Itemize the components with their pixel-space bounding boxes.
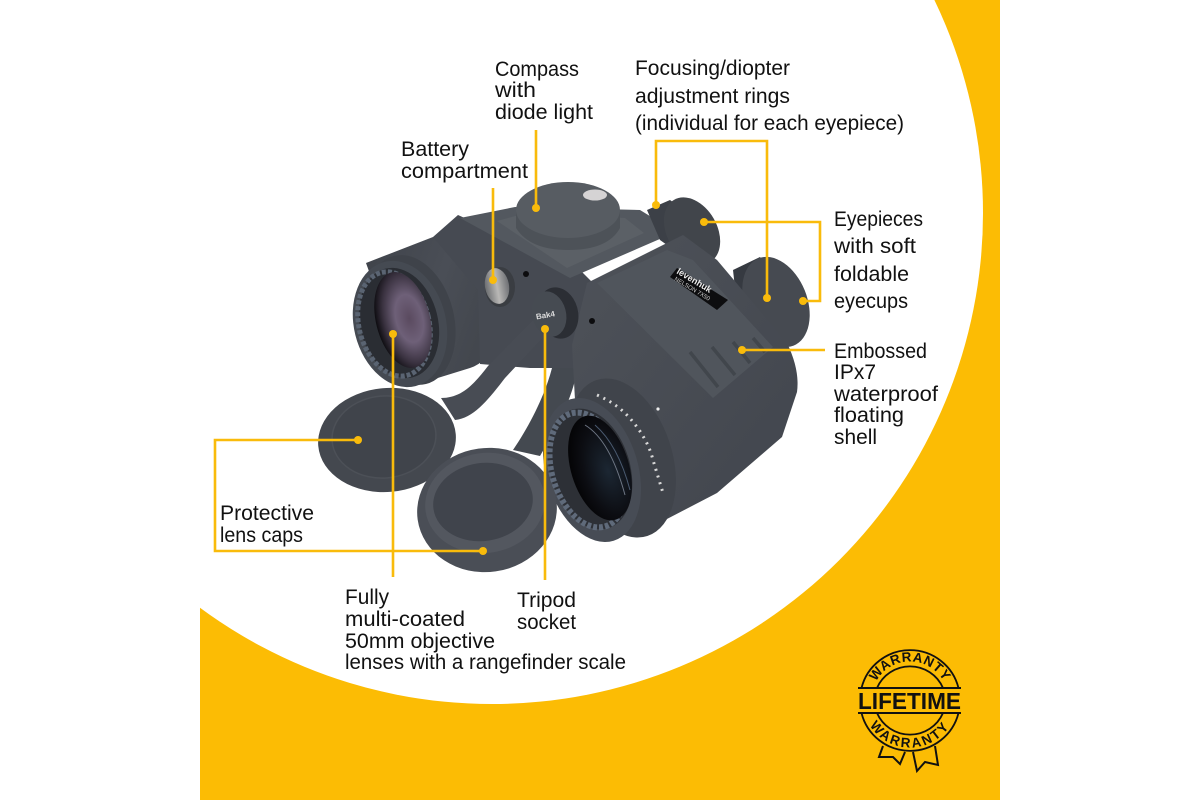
label: lens caps: lens caps (220, 524, 303, 547)
badge: lifetime warranty: WARRANTY (871, 720, 947, 748)
callout: objective lenses line (389, 330, 397, 577)
near eyepiece (730, 247, 822, 357)
label: battery: compartment (401, 160, 528, 183)
Bak4 focus knob: Bak4 (535, 309, 556, 322)
background: yellow panel with white circle (200, 0, 1000, 800)
label: embossed shell: shell (834, 426, 877, 449)
label: focusing rings: adjustment rings (635, 85, 790, 108)
label: objective lenses: 50mm objective (345, 630, 495, 653)
label: focusing rings: Focusing/diopter (635, 57, 790, 80)
callout: embossed shell line (738, 346, 825, 354)
label: compass: diode light (495, 101, 593, 124)
label: objective lenses: Fully (345, 586, 389, 609)
label: eyepieces: with soft (833, 235, 916, 258)
label: compass: with (494, 79, 536, 102)
lens cap: far (closed) (314, 382, 460, 498)
label: compass: Compass (495, 58, 579, 81)
label: eyepieces: eyecups (834, 290, 908, 313)
label: tripod: Tripod (517, 589, 576, 612)
label: lens caps (220, 502, 314, 547)
label: eyepieces (833, 208, 923, 313)
label: tripod (517, 589, 576, 634)
label: objective lenses (345, 586, 626, 674)
label: embossed shell: IPx7 (834, 361, 876, 384)
strap: near cap (513, 326, 582, 456)
nameplate (670, 266, 728, 310)
callout: tripod socket line (541, 325, 549, 580)
label: embossed shell: Embossed (834, 340, 927, 363)
label: focusing rings (635, 57, 904, 135)
far eyepiece (647, 187, 732, 275)
compass housing (516, 182, 620, 250)
label: battery (401, 138, 528, 183)
label: battery: Battery (401, 138, 470, 161)
label: embossed shell (833, 340, 938, 449)
badge: lifetime warranty: WARRANTY (868, 652, 952, 680)
label: embossed shell: waterproof (833, 383, 938, 406)
label: focusing rings: (individual for each eyepiece) (635, 112, 904, 135)
top plate (460, 207, 676, 278)
product photo: binoculars with lens caps (314, 182, 822, 581)
label: lens caps: Protective (220, 502, 314, 525)
label: objective lenses: lenses with a rangefinder scale (345, 651, 626, 674)
nameplate: levenhuk (675, 266, 714, 295)
callout: lens caps bracket (215, 436, 487, 555)
label: eyepieces: foldable (834, 263, 909, 286)
Bak4 focus knob (527, 283, 584, 343)
label: embossed shell: floating (834, 404, 904, 427)
main body (572, 235, 798, 533)
callout: compass line (532, 130, 540, 212)
nameplate: NELSON 7X50 (673, 277, 711, 303)
central bridge (433, 215, 610, 368)
label: tripod: socket (517, 611, 576, 634)
near objective front ring and lens (526, 386, 658, 554)
strap: far cap (441, 318, 550, 420)
near barrel collar with rangefinder scale (549, 365, 695, 551)
badge: lifetime warranty: LIFETIME (858, 688, 961, 714)
far objective barrel (366, 237, 494, 381)
body top panel (597, 250, 773, 398)
battery compartment cap (482, 266, 515, 307)
label: compass (494, 58, 593, 124)
callout: focusing rings bracket (652, 141, 771, 302)
far objective front ring and lens (340, 245, 469, 397)
callout: battery line (489, 188, 497, 284)
badge: lifetime warranty (858, 649, 961, 774)
lens cap: near (open) (409, 439, 565, 581)
label: objective lenses: multi-coated (345, 608, 465, 631)
small screws (523, 271, 595, 324)
callout: eyepieces bracket (700, 218, 820, 305)
label: eyepieces: Eyepieces (834, 208, 923, 231)
embossed ridges (690, 338, 765, 387)
